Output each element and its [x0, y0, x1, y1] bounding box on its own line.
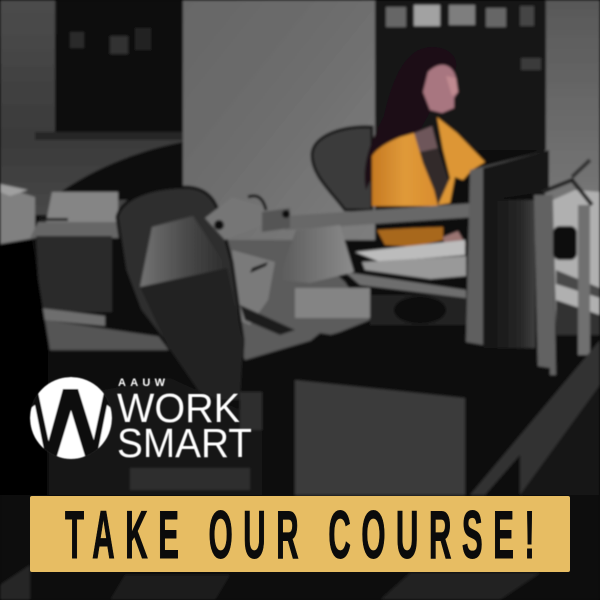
papers by keyboard: [345, 240, 466, 298]
dark chair back left: [62, 142, 183, 200]
background chair: [312, 127, 372, 210]
lower left floor: [48, 378, 262, 495]
sleeve: [377, 227, 443, 247]
logo text: AAUW: AAUW: [118, 377, 166, 389]
cardigan: [372, 133, 438, 206]
right window: [375, 0, 546, 150]
bottom strip: [0, 495, 600, 600]
icon: W emblem: [27, 377, 115, 462]
hand: [443, 231, 466, 248]
foreground cabinet: [262, 333, 550, 495]
dark top: [420, 148, 450, 205]
back wall: [0, 0, 600, 240]
button label: TAKE OUR COURSE!: [65, 498, 545, 573]
middle desk surface: [228, 240, 470, 360]
diagonal shelf lower right: [470, 340, 600, 600]
woman: [365, 47, 485, 248]
lamp shade left: [140, 216, 227, 287]
lamp head centre: [205, 196, 290, 240]
lamp beam: [285, 202, 490, 230]
left desk and papers: [0, 184, 170, 350]
nose highlight: [446, 76, 458, 96]
foreground chair: [117, 187, 243, 400]
face: [423, 65, 458, 113]
left window: [35, 0, 183, 140]
logo text: SMART: SMART: [117, 420, 252, 466]
call to action button: [30, 496, 570, 573]
monitor: [466, 150, 556, 375]
logo: AAUW Work Smart: [27, 377, 252, 466]
hair: [365, 47, 456, 190]
logo text: WORK: WORK: [117, 385, 240, 431]
lamp shade right: [278, 225, 354, 283]
right side papers and stand: [542, 160, 600, 355]
neck: [412, 126, 438, 154]
button background: [30, 496, 570, 572]
black foreground left: [0, 240, 48, 600]
